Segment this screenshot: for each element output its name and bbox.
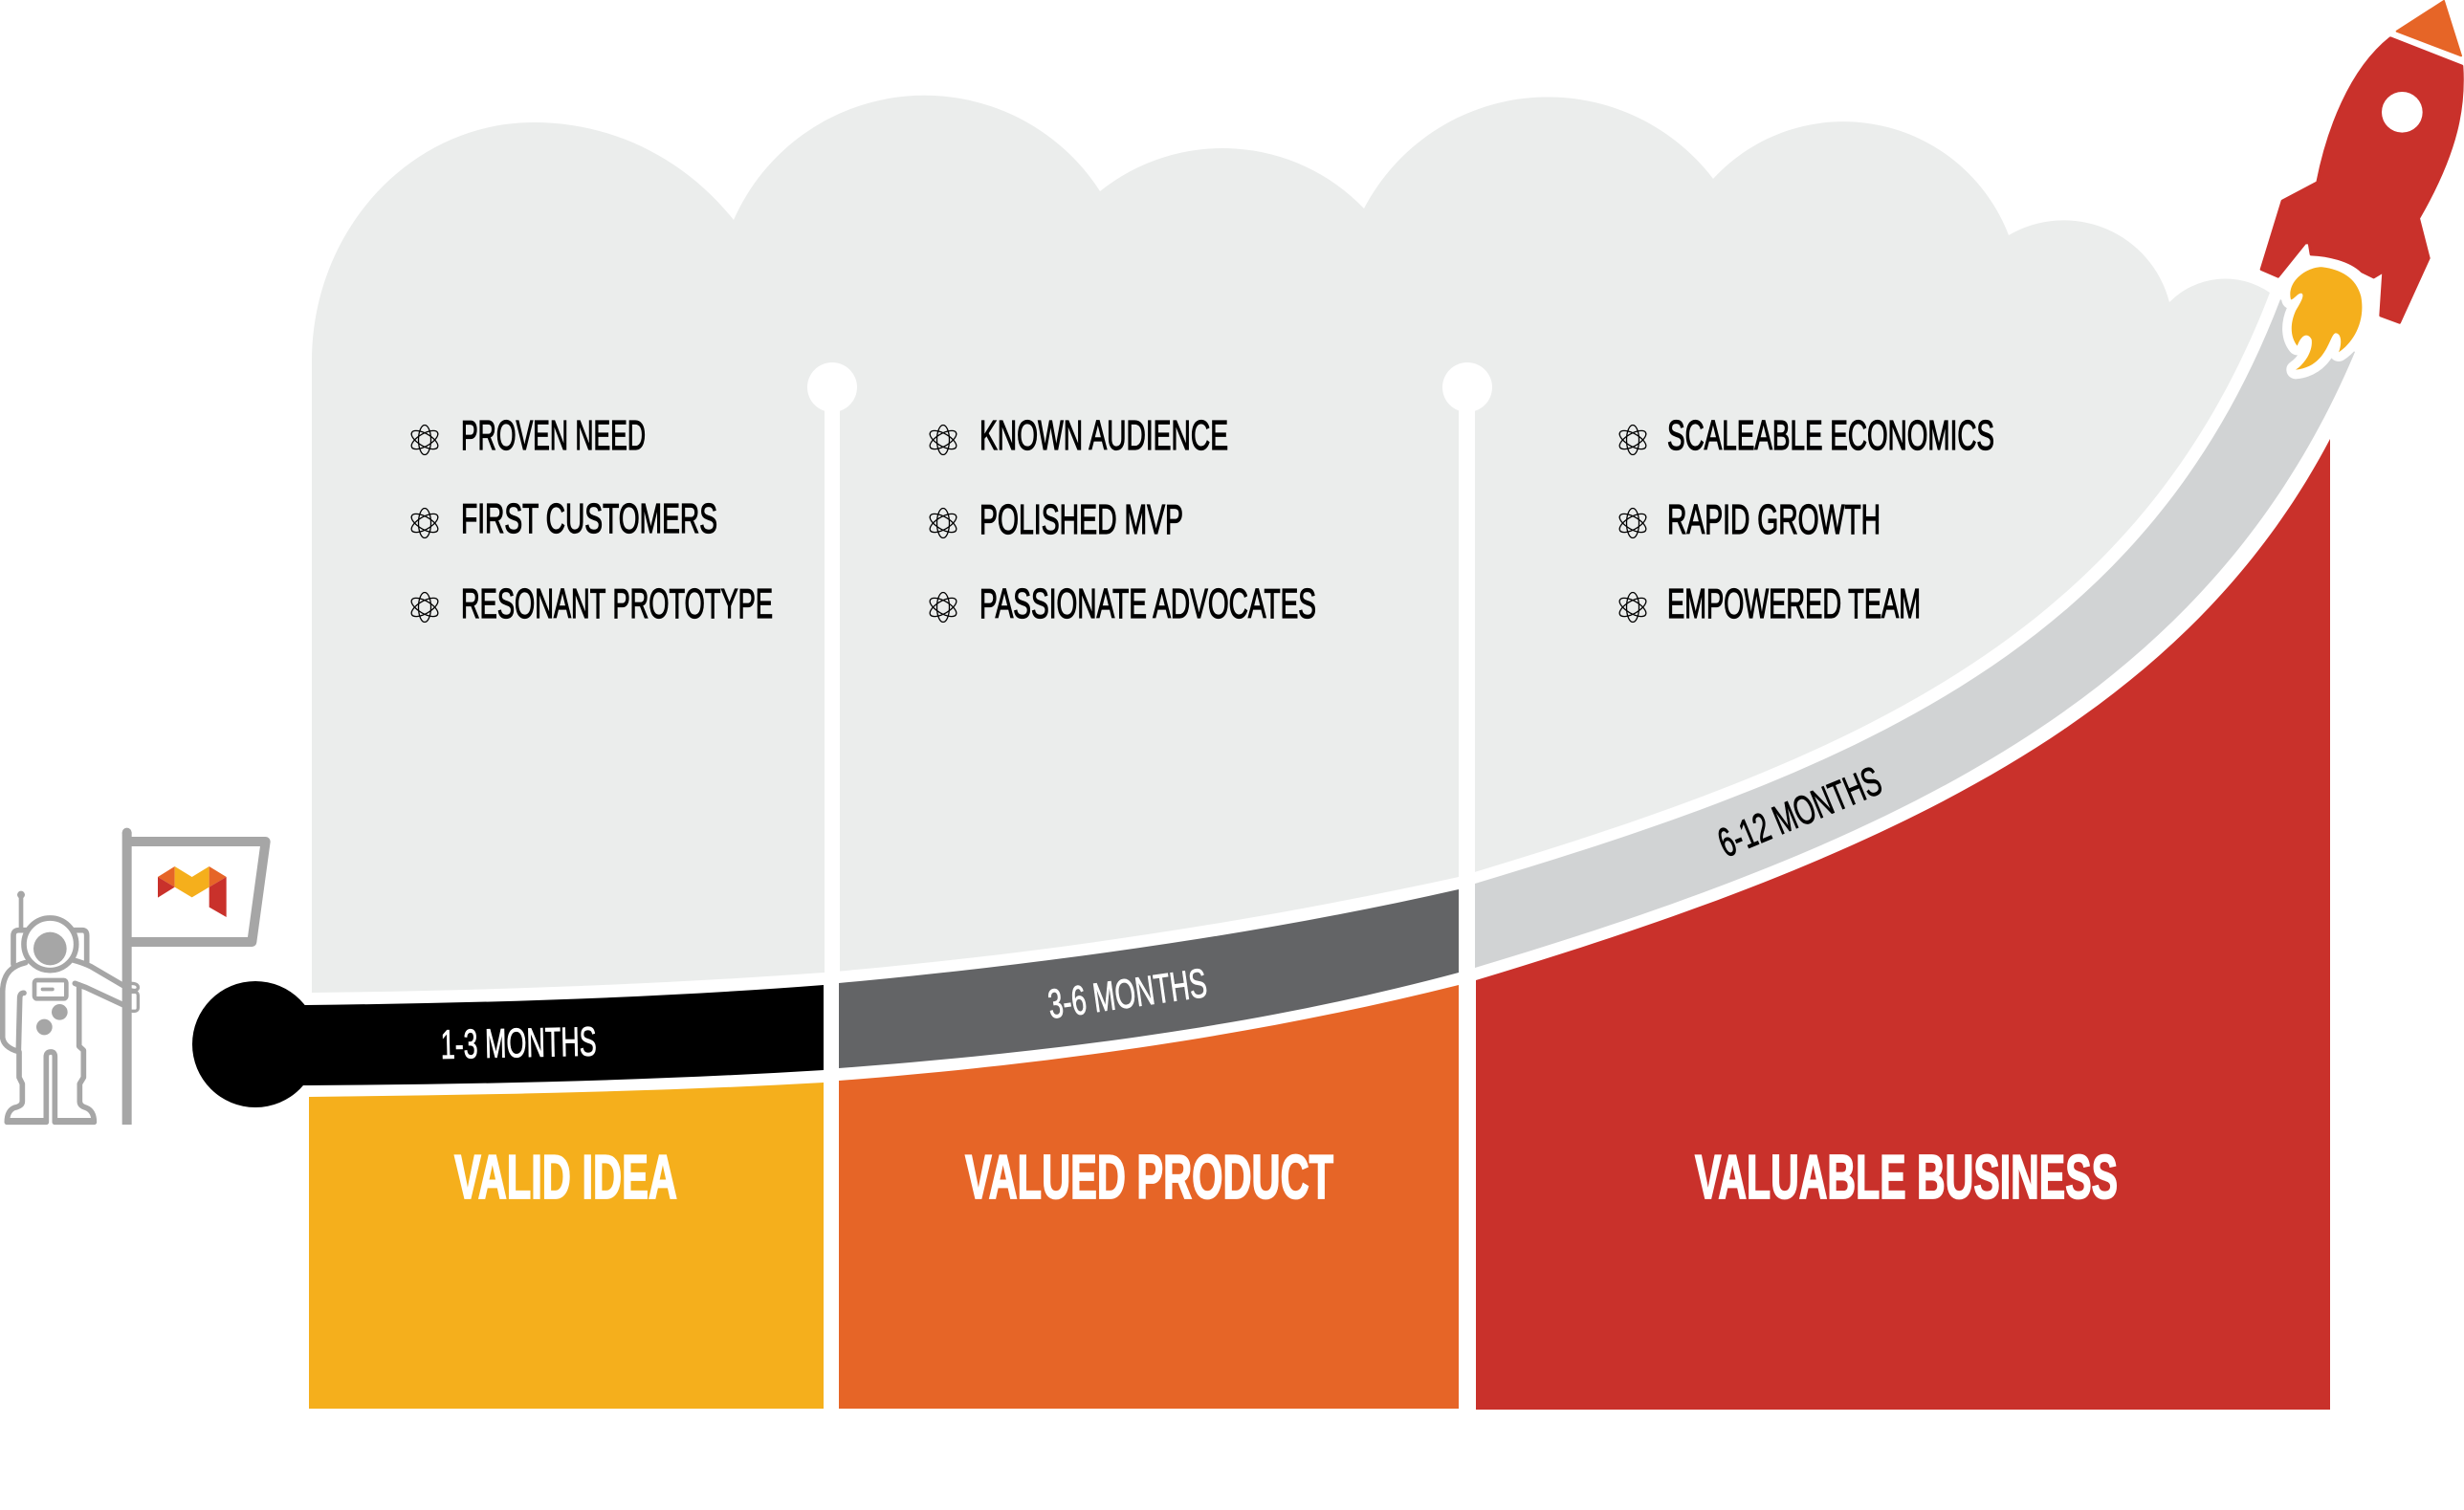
- band: 6-12 months light grey segment: [1475, 299, 2355, 968]
- block: valid idea: [309, 1083, 824, 1409]
- list: valid idea criteria: [408, 412, 773, 627]
- label: 3-6 months: 3-6 MONTHS: [1045, 960, 1210, 1028]
- block: valued product: [839, 985, 1459, 1409]
- bullet: resonant prototype: [408, 580, 773, 627]
- bullet: polished mvp: POLISHED MVP: [979, 496, 1183, 543]
- flame: [2290, 267, 2362, 370]
- bullet: known audience: KNOWN AUDIENCE: [979, 412, 1228, 459]
- list: valuable business criteria: [1617, 412, 1994, 627]
- bullet: polished mvp: [927, 496, 1183, 543]
- heading: valued product: VALUED PRODUCT: [965, 1142, 1333, 1212]
- divider: second milestone pin: [1442, 362, 1492, 1410]
- bullet: empowered team: [1617, 580, 1921, 627]
- label: 6-12 months: 6-12 MONTHS: [1711, 758, 1888, 866]
- bullet: known audience: [927, 412, 1228, 459]
- bullet: first customers: FIRST CUSTOMERS: [461, 495, 717, 542]
- bullet: rapid growth: [1617, 496, 1881, 543]
- rocket nose: [2397, 1, 2461, 55]
- astronaut figure: [3, 891, 138, 1122]
- block: valuable business: [1476, 439, 2330, 1410]
- band: 1-3 months black segment with start ball: [192, 981, 824, 1107]
- bullet: proven need: PROVEN NEED: [461, 412, 646, 459]
- bullet: first customers: [408, 495, 717, 542]
- panel: cloud background: [312, 96, 2270, 993]
- bullet: passionate advocates: [927, 580, 1316, 627]
- rocket window: [2382, 92, 2423, 133]
- rocket body: [2261, 38, 2463, 322]
- bullet: rapid growth: RAPID GROWTH: [1667, 496, 1881, 543]
- divider: first milestone pin: [807, 362, 857, 1410]
- flag logo: [158, 866, 227, 917]
- list: valued product criteria: [927, 412, 1316, 627]
- flag pole and flag: [122, 828, 266, 1125]
- icon: astronaut with flag: [3, 828, 266, 1125]
- bullet: passionate advocates: PASSIONATE ADVOCATES: [979, 580, 1316, 627]
- band: 3-6 months dark grey segment: [839, 889, 1459, 1068]
- bullet: scaleable economics: [1617, 412, 1994, 459]
- bullet: resonant prototype: RESONANT PROTOTYPE: [461, 580, 773, 627]
- label: 1-3 months: 1-3 MONTHS: [440, 1019, 597, 1068]
- icon: rocket with flame: [2261, 1, 2463, 370]
- bullet: empowered team: EMPOWERED TEAM: [1667, 580, 1921, 627]
- bullet: proven need: [408, 412, 646, 459]
- heading: valuable business: VALUABLE BUSINESS: [1695, 1142, 2118, 1212]
- heading: valid idea: VALID IDEA: [454, 1142, 677, 1212]
- bullet: scaleable economics: SCALEABLE ECONOMICS: [1667, 412, 1994, 459]
